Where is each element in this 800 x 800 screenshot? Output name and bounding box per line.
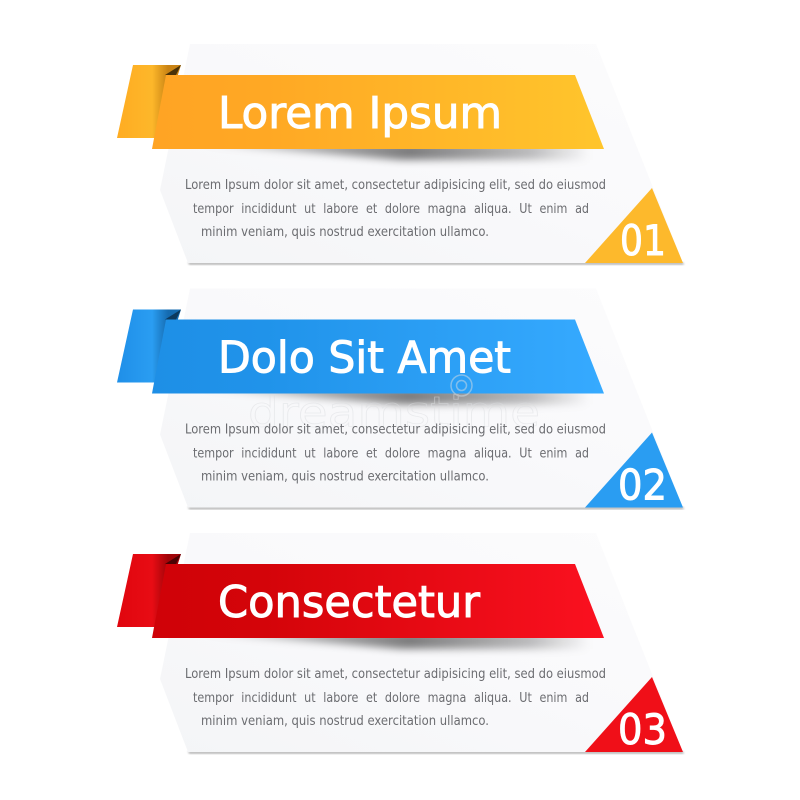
ribbon tail 1	[117, 65, 181, 138]
panel group 3: Consectetur	[117, 533, 684, 754]
banner shadow 1	[190, 143, 590, 160]
ribbon tail 2	[117, 310, 181, 382]
number badge 2: 02	[618, 460, 667, 510]
ribbon banner 3	[152, 564, 604, 638]
number badge 3	[585, 677, 683, 754]
heading 1: Lorem Ipsum	[218, 88, 502, 139]
ribbon banner 2	[152, 320, 604, 394]
body text 3: minim veniam, quis nostrud exercitation ullamco.	[201, 713, 489, 729]
body text 2	[185, 422, 606, 484]
body text 1: minim veniam, quis nostrud exercitation ullamco.	[201, 224, 489, 240]
body text 1: Lorem Ipsum dolor sit amet, consectetur adipisicing elit, sed do eiusmod	[185, 177, 606, 193]
body text 3	[185, 666, 606, 729]
body text 2: Lorem Ipsum dolor sit amet, consectetur adipisicing elit, sed do eiusmod	[185, 422, 606, 438]
body text 2: tempor incididunt ut labore et dolore magna aliqua. Ut enim ad	[193, 446, 589, 462]
body text 3: Lorem Ipsum dolor sit amet, consectetur adipisicing elit, sed do eiusmod	[185, 666, 606, 682]
banner shadow 3	[190, 632, 590, 649]
number badge 1	[585, 188, 683, 265]
panel group 1: Lorem Ipsum	[117, 44, 684, 265]
number badge 3: 03	[618, 705, 667, 754]
ribbon tail 3	[117, 554, 181, 627]
number badge 2	[585, 432, 683, 510]
panel group 2: Dolo Sit Amet	[117, 288, 684, 510]
panel background 1	[160, 44, 684, 265]
number badge 1: 01	[620, 216, 666, 265]
watermark: dreamstime	[248, 388, 540, 436]
ribbon banner 1	[152, 75, 604, 149]
body text 2: minim veniam, quis nostrud exercitation ullamco.	[201, 468, 489, 484]
body text 1	[185, 177, 606, 240]
body text 3: tempor incididunt ut labore et dolore magna aliqua. Ut enim ad	[193, 690, 589, 706]
panel background 2	[160, 288, 684, 510]
panel background 3	[160, 533, 684, 754]
body text 1: tempor incididunt ut labore et dolore magna aliqua. Ut enim ad	[193, 201, 589, 217]
watermark	[248, 375, 540, 436]
heading 3: Consectetur	[218, 577, 481, 628]
heading 2: Dolo Sit Amet	[218, 332, 511, 384]
banner shadow 2	[190, 388, 590, 404]
